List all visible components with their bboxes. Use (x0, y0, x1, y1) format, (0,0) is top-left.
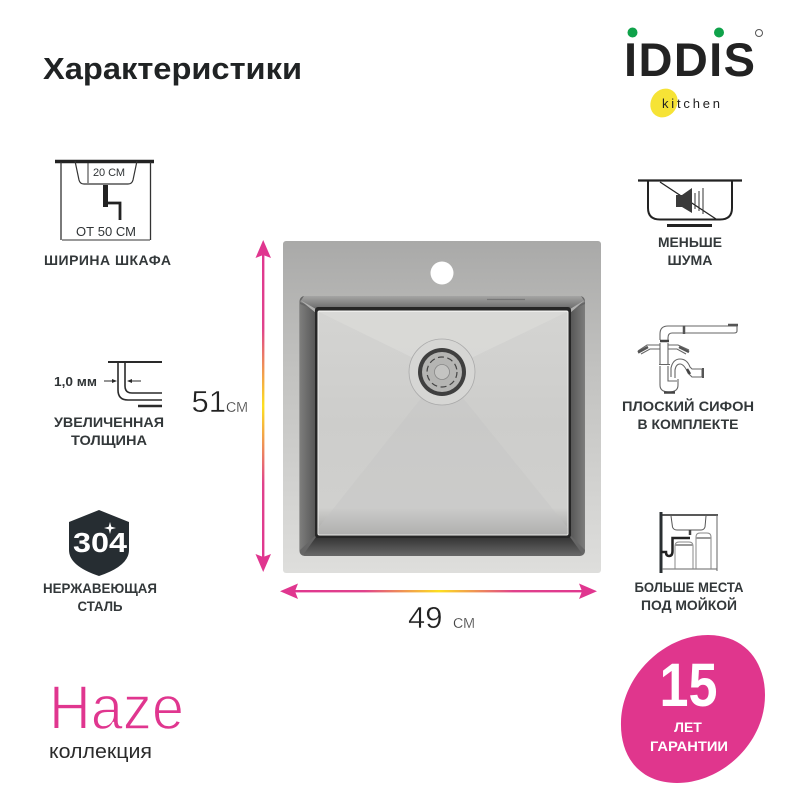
sink (283, 241, 601, 573)
label: siphon (622, 397, 754, 432)
label: more space: ПОД МОЙКОЙ (641, 596, 737, 613)
logo: IDDIS kitchen: IDDIS (624, 33, 755, 86)
icon: thickness (54, 362, 162, 406)
height label: СМ (226, 399, 248, 416)
height label (192, 384, 248, 419)
label: less noise (658, 234, 722, 268)
label: more space: БОЛЬШЕ МЕСТА (634, 579, 744, 595)
label: thickness: УВЕЛИЧЕННАЯ (54, 414, 164, 430)
label: less noise: ШУМА (668, 252, 712, 268)
width label (408, 600, 475, 635)
warranty badge: 15 (660, 651, 718, 719)
logo: IDDIS kitchen (624, 28, 762, 123)
icon: cabinet width: 20 СМ (93, 167, 125, 179)
icon: 304 shield: 304 (73, 527, 127, 558)
icon: cabinet width (55, 161, 154, 240)
label: steel: НЕРЖАВЕЮЩАЯ (43, 580, 157, 596)
label: siphon: ПЛОСКИЙ СИФОН (622, 397, 754, 414)
width label: 49 (408, 600, 442, 635)
icon: cabinet width: ОТ 50 СМ (76, 224, 136, 239)
title: Характеристики (43, 51, 302, 86)
logo: IDDIS kitchen: kitchen (662, 96, 720, 111)
height label: 51 (192, 384, 226, 419)
label: thickness (54, 414, 164, 448)
icon: 304 shield (69, 510, 129, 576)
label: less noise: МЕНЬШЕ (658, 234, 722, 250)
collection caption: коллекция (49, 741, 152, 763)
icon: less noise (638, 180, 742, 226)
collection name: Haze (49, 674, 184, 743)
height arrow (256, 240, 271, 572)
warranty badge: ГАРАНТИИ (650, 738, 728, 754)
icon: more space (660, 512, 718, 573)
label: thickness: ТОЛЩИНА (71, 432, 147, 448)
warranty badge: ЛЕТ (674, 719, 702, 735)
icon: thickness: 1,0 мм (54, 374, 97, 389)
label: more space (634, 579, 744, 613)
warranty badge (621, 635, 765, 783)
width arrow (280, 584, 597, 599)
label: steel (43, 580, 157, 614)
icon: siphon (638, 325, 738, 392)
label: siphon: В КОМПЛЕКТЕ (638, 416, 738, 432)
label: steel: СТАЛЬ (78, 598, 122, 614)
label: cabinet width: ШИРИНА ШКАФА (44, 252, 171, 268)
width label: СМ (453, 615, 475, 632)
